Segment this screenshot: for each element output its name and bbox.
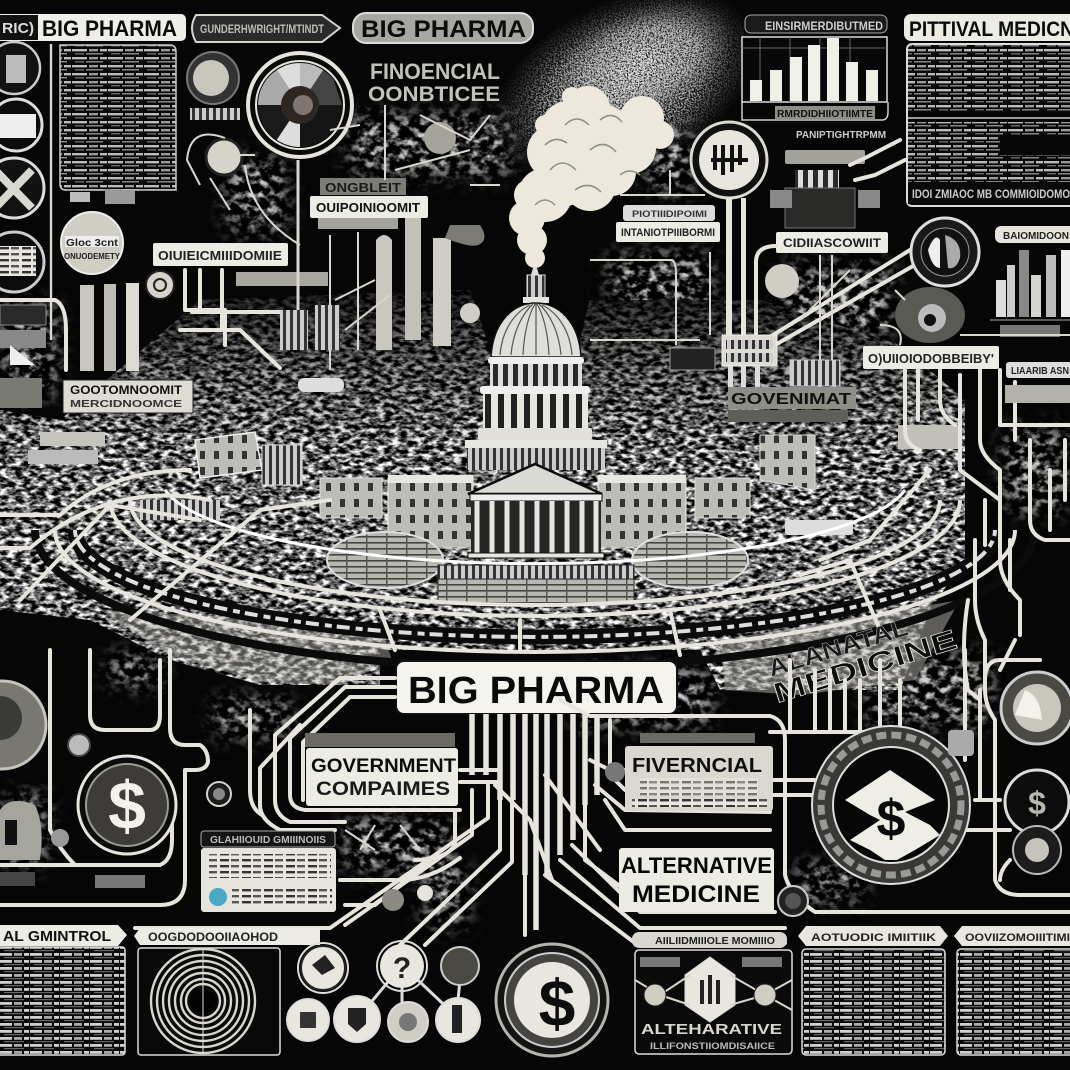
circle label: ONUODEMETY: [64, 252, 121, 261]
banner: big pharma left: RIC): [2, 20, 34, 37]
banner: garbled pill: GUNDERHWRIGHT/MTINDT: [200, 22, 325, 36]
drum: [465, 440, 607, 470]
eye ornament: [880, 287, 1070, 345]
bottom panel: text mid: [802, 949, 945, 1055]
label box below pipes: [722, 335, 840, 388]
label stack: ongblett: OUIPOINIOOMIT: [316, 200, 420, 215]
vertical pipes below big pharma: [460, 714, 600, 930]
bars: [996, 250, 1070, 317]
banner: garbled pill: [192, 15, 340, 42]
chart panel right: [990, 226, 1070, 337]
label stack: ongblett: [310, 178, 428, 229]
bottom header: antefac: [798, 926, 948, 946]
chart panel top right: EINSIRMERDIBUTMED: [765, 19, 883, 33]
medal icons: [187, 52, 300, 245]
smoke cloud: [509, 86, 674, 268]
label: outer property: [863, 346, 1070, 378]
central city texture: [0, 290, 965, 690]
capitol building: [320, 268, 750, 605]
dollar coin left: [78, 756, 176, 854]
pipe bars left: [0, 160, 328, 371]
info card: GLAHIIOUID GMIIINOIIS: [210, 835, 326, 846]
label: outliers: CIDIIASCOWIIT: [783, 236, 882, 250]
big dollar badge: $: [877, 790, 906, 848]
big pharma main label: BIG PHARMA: [408, 670, 664, 712]
label: financial: FIVERNCIAL: [632, 755, 762, 777]
bottom header: right: OOVIIZOMOIIITIMI: [965, 932, 1070, 944]
label: financial: [605, 733, 773, 811]
dollar coin bottom: [496, 944, 608, 1056]
label stack upper mid: INTANIOTPIIIBORMI: [621, 227, 715, 239]
spiral chart panel: [138, 948, 280, 1055]
front terrace: [327, 532, 748, 605]
bottom header: right: [954, 926, 1070, 946]
dollar coin left: $: [108, 768, 146, 844]
alternative diagram panel: ALTEHARATIVE: [641, 1021, 782, 1038]
bottom header: alternative: [632, 932, 787, 948]
chart panel right: BAIOMIDOON: [1003, 231, 1069, 242]
left icon column: [0, 42, 51, 340]
label stack upper mid: PIOTIIIDIPOIMI: [632, 209, 707, 219]
label: government monitoring: [63, 380, 193, 413]
label: outliers: [756, 232, 920, 390]
bottom header: control: [0, 925, 127, 946]
label: government monitoring: MERCIDNOOMCE: [70, 399, 182, 410]
small seal: [207, 782, 231, 806]
speckled smoke plume: [462, 0, 788, 221]
big pharma main label: [396, 661, 677, 714]
left label stack: [0, 305, 46, 408]
ornament cluster: [345, 825, 433, 911]
bottom header: alternative: AIILIIDMIIIOLE MOMIIIO: [655, 936, 775, 947]
small badge: [778, 886, 808, 916]
label: outer monitoring: [153, 243, 288, 266]
magnifier circle with pipes: [691, 122, 767, 336]
alternative medicine banner rotated: ALANATAL: [765, 614, 911, 682]
text panel top right: [907, 44, 1070, 206]
left coin: [0, 681, 90, 769]
helmet figure: [0, 801, 145, 888]
colonnade lower: [478, 394, 592, 440]
alternative diagram panel: [635, 950, 792, 1054]
chart panel top right: RMRDIDHIIOTIIMTE: [777, 109, 873, 120]
right circles: [948, 672, 1070, 874]
info card: [201, 831, 336, 912]
bars: [750, 38, 878, 101]
alternative medicine banner rotated: [763, 602, 960, 709]
chart panel top right: [742, 15, 888, 120]
label: government companies: [305, 733, 458, 806]
right circuit pipes: [525, 650, 1070, 943]
label: government monitoring: GOOTOMNOOMIT: [70, 383, 183, 397]
blocks around capitol: [28, 348, 960, 535]
network of circle icons: [287, 941, 480, 1042]
label: outer monitoring: OIUIEICMIIIDOMIIE: [158, 248, 282, 263]
label stack: ongblett: ONGBLEIT: [325, 180, 401, 195]
figure under label: [770, 130, 905, 228]
heading: finoencial: OONBTICEE: [368, 83, 500, 106]
left circuit pipes: [0, 650, 512, 945]
label: alternative medicine: [619, 848, 774, 912]
right pipes: [905, 370, 1070, 895]
ring roads: [0, 470, 1035, 668]
alternative medicine banner rotated: MEDICINE: [770, 624, 960, 709]
label: outer property: O)UIIOIODOBBEIBY': [868, 351, 994, 366]
bottom header: antefac: AOTUODIC IMIITIIK: [811, 932, 936, 944]
circle label: Gloc 3cnt: [66, 238, 119, 249]
label: alternative medicine: ALTERNATIVE: [621, 853, 772, 878]
text panel top left: [60, 45, 176, 204]
dollar coin bottom: $: [539, 966, 575, 1040]
network of circle icons: ?: [393, 952, 411, 985]
bottom header: spiral: OOGDODOOIIAOHOD: [148, 930, 278, 944]
dome: [491, 303, 581, 357]
figure under label: PANIPTIGHTRPMM: [796, 130, 886, 141]
sketch detail in dark areas: [0, 98, 1070, 942]
heading: finoencial: FINOENCIAL: [370, 59, 500, 84]
label stack upper mid: [590, 170, 720, 345]
right circles: $: [1028, 785, 1046, 821]
towers left cluster: [280, 218, 485, 370]
bottom header: spiral: [134, 928, 320, 945]
emblem: globe right: [911, 218, 979, 286]
alternative diagram panel: ILLIFONSTIIOMDISAIICE: [650, 1041, 775, 1051]
label: govenimat: [728, 387, 856, 422]
bottom panel: text left: [0, 947, 125, 1055]
bottom panel: text right: [957, 949, 1070, 1055]
emblem below heading: [330, 105, 500, 185]
rubble patches: [100, 600, 960, 695]
label: government companies: GOVERNMENT: [311, 756, 456, 777]
wings: [320, 475, 750, 548]
colonnade upper: [480, 357, 590, 394]
teal icon: [209, 888, 227, 906]
label: govenimat: GOVENIMAT: [731, 391, 851, 408]
banner: big pharma left: BIG PHARMA: [42, 16, 177, 41]
heading: finoencial: [368, 59, 500, 106]
bottom header: control: AL GMINTROL: [3, 928, 111, 945]
circle label: [61, 212, 123, 274]
pie chart ring: [248, 53, 352, 157]
big dollar badge: [812, 726, 970, 884]
label: alternative medicine: MEDICINE: [632, 881, 760, 908]
label: government companies: COMPAIMES: [316, 779, 450, 800]
lantern: [523, 268, 549, 303]
portico: [468, 464, 604, 558]
banner: big pharma centre: BIG PHARMA: [361, 16, 526, 43]
